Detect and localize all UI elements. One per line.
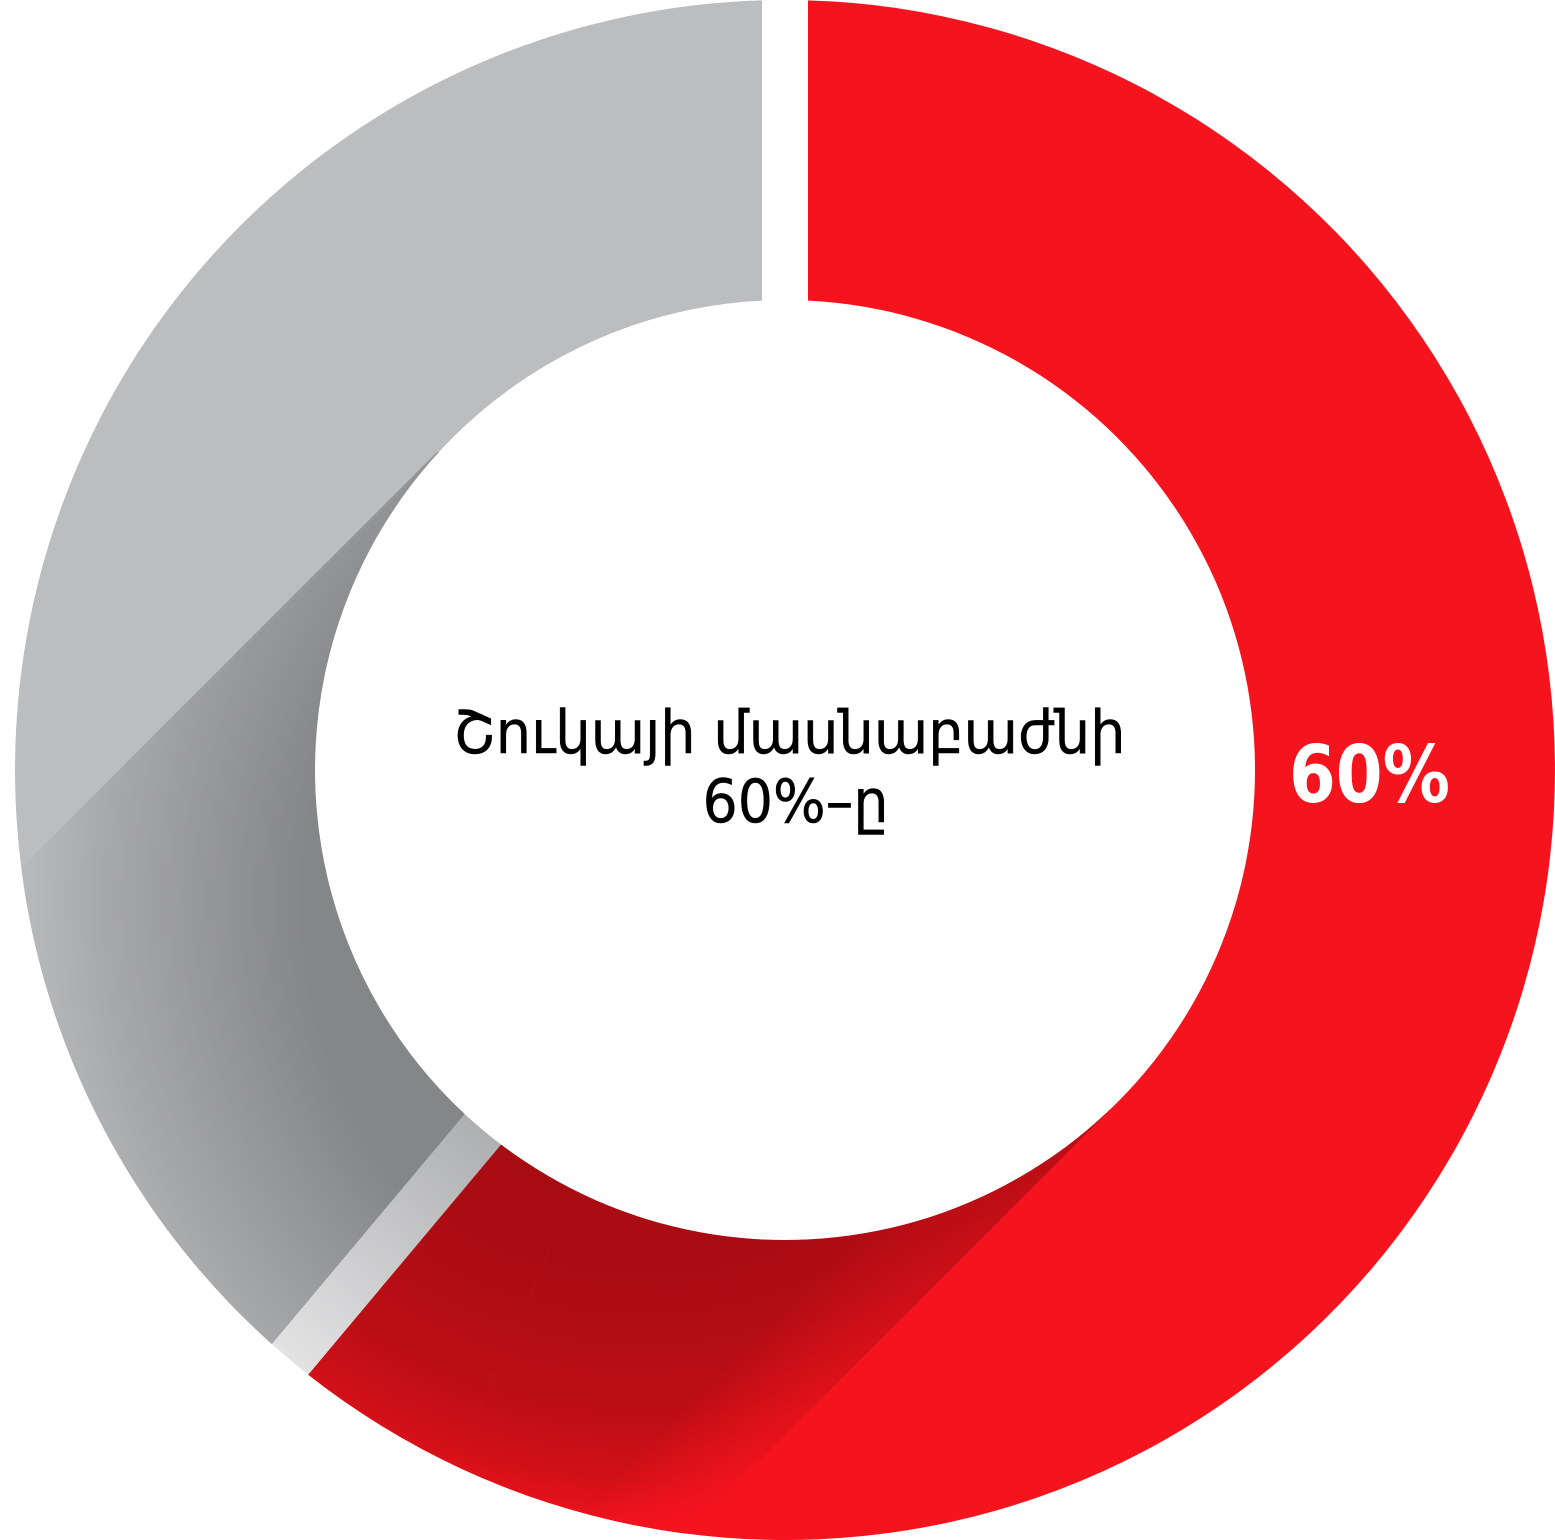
segment: gray remaining share xyxy=(15,0,762,1344)
segment: pale gap band xyxy=(272,1114,501,1375)
center label: Շուկայի մասնաբաժնի xyxy=(454,698,1126,768)
value label: 60 percent: 60% xyxy=(1289,729,1450,821)
center label: 60%–ը xyxy=(702,767,888,837)
center label xyxy=(454,698,1126,837)
